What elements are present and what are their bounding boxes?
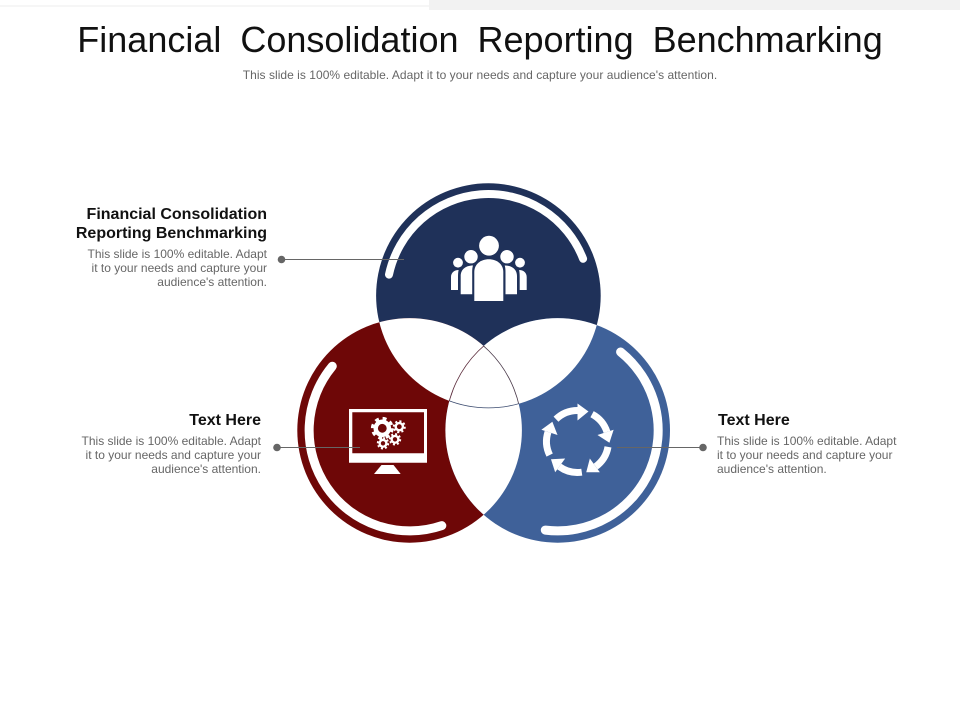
- icon: cycle arrows: [535, 404, 617, 485]
- icon: monitor with gears: [349, 409, 427, 474]
- label: top heading: [76, 206, 267, 242]
- label: right body: it to your needs and capture your: [717, 448, 892, 462]
- label: top body: [88, 247, 267, 289]
- label: top body: audience's attention.: [157, 275, 267, 289]
- top grey band: [429, 0, 960, 10]
- label: top body: This slide is 100% editable. Adapt: [88, 247, 267, 261]
- subtitle: This slide is 100% editable. Adapt it to your needs and capture your audience's attention.: [243, 68, 717, 82]
- icon: people group: [451, 236, 527, 301]
- label: left body: it to your needs and capture your: [86, 448, 261, 462]
- label: right heading: Text Here: [718, 412, 790, 429]
- ring arc: top: [389, 194, 583, 275]
- leader: top label: [278, 256, 404, 263]
- top faint rule: [0, 5, 429, 7]
- label: left body: This slide is 100% editable. Adapt: [82, 434, 261, 448]
- label: left heading: Text Here: [189, 412, 261, 429]
- leader: left label: [273, 444, 360, 451]
- venn diagram: [273, 183, 707, 543]
- label: top heading: Financial Consolidation: [87, 206, 267, 223]
- label: top body: it to your needs and capture your: [92, 261, 267, 275]
- ring arc: right: [545, 352, 658, 531]
- label: left body: audience's attention.: [151, 462, 261, 476]
- label: top heading: Reporting Benchmarking: [76, 225, 267, 242]
- label: left body: [82, 434, 261, 476]
- circle: right blue: [445, 318, 670, 543]
- label: right body: audience's attention.: [717, 462, 827, 476]
- centre overlap outline: [449, 346, 519, 408]
- ring arc: left: [309, 366, 442, 531]
- circle: top navy: [376, 183, 601, 408]
- leader: right label: [617, 444, 707, 451]
- circle: left maroon: [297, 318, 522, 543]
- label: right body: [717, 434, 896, 476]
- label: right body: This slide is 100% editable. Adapt: [717, 434, 896, 448]
- title: Financial Consolidation Reporting Benchmarking: [77, 19, 883, 60]
- white overlap regions: [379, 318, 597, 515]
